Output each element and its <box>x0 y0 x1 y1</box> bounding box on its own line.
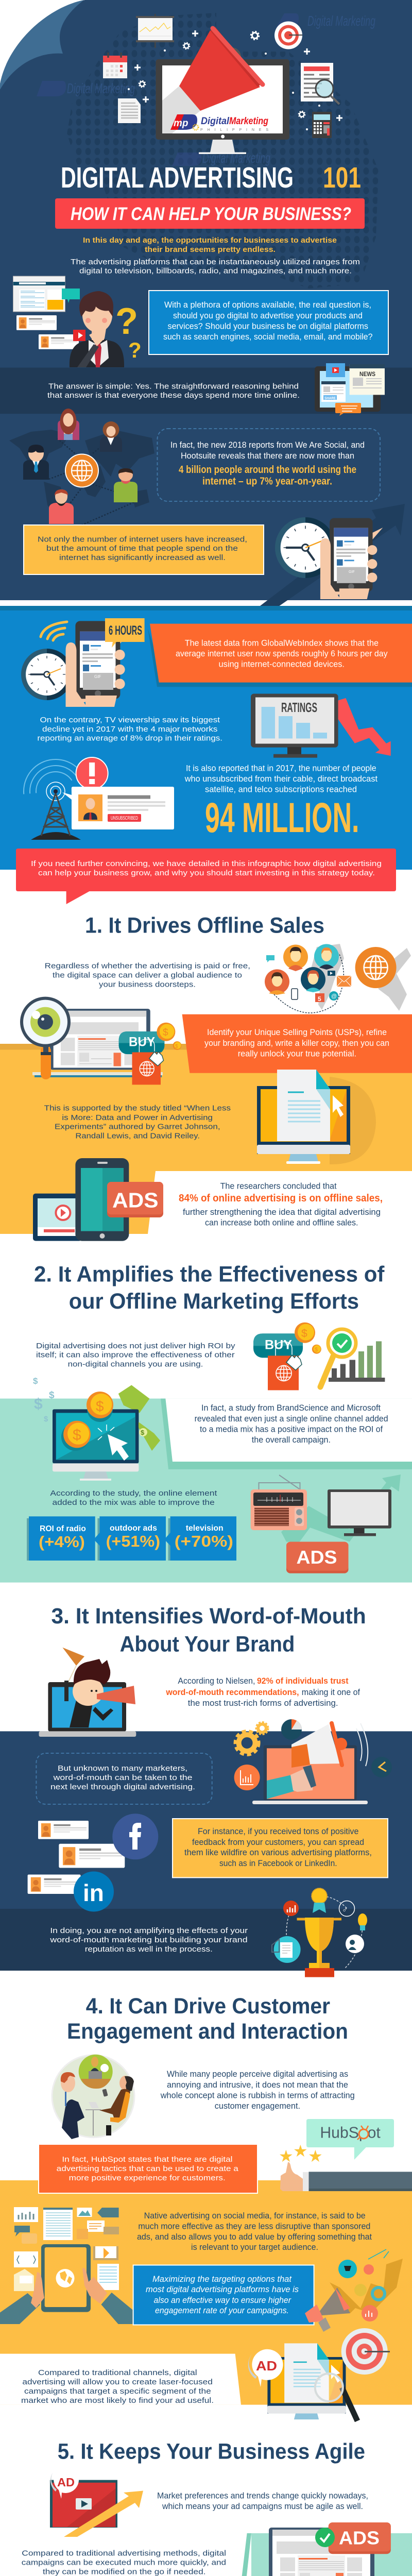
text: perception: whole concept alone is rubbish in terms of attracting <box>160 2091 355 2100</box>
illustration: monitor with coins and money: $ <box>44 1415 48 1423</box>
text: native advertising: much more effective as they are less disruptive than sponsored <box>138 2222 370 2231</box>
illustration: signal tower <box>21 757 90 840</box>
illustration: monitor with coins and money: $ <box>73 1427 81 1444</box>
stat: 94 million <box>184 764 377 841</box>
person: woman in pink <box>49 489 74 524</box>
text: 84 percent finding: The researchers concluded that <box>220 1182 337 1191</box>
text: native advertising: Native advertising on social media, for instance, is said to be <box>144 2211 366 2221</box>
text: brand reputation: In doing, you are not amplifying the effects of your <box>50 1926 248 1935</box>
panel: section 2 offline marketing efforts <box>0 1262 412 1583</box>
illustration: news tablet <box>315 363 385 416</box>
illustration: trophy with achievement icons <box>272 1888 367 1977</box>
text: Nielsen trust: According to Nielsen, <box>178 1676 255 1686</box>
stat boxes: ROI improvements: (+51%) <box>106 1532 160 1550</box>
band: the answer is simple: that answer is that everyone these days spend more time online. <box>47 391 300 400</box>
text: executed quickly <box>22 2549 226 2576</box>
illustration: thinking businessman: ? <box>128 338 142 362</box>
text: laser focused campaigns <box>21 2368 214 2405</box>
icons: gears plus dots <box>128 30 342 130</box>
text: 84 percent finding: 84% of online advertising is on offline sales, <box>179 1193 383 1204</box>
callout: targeting options: most digital advertising platforms have is <box>146 2285 299 2294</box>
callout: wildfire <box>173 1819 388 1877</box>
watermark logos: Digital Marketing <box>202 150 270 166</box>
callout: 4 billion people <box>158 429 380 501</box>
callout: HubSpot speech bubble: HubSpot <box>320 2123 381 2141</box>
stat: 94 million: satellite, and telco subscriptions reached <box>205 785 357 794</box>
text: perception: annoying and intrusive, it does not mean that the <box>167 2080 348 2090</box>
callout: next level <box>36 1753 212 1804</box>
text: Nielsen trust <box>165 1676 360 1708</box>
callout: 4 billion people: 4 billion people around the world using the <box>179 464 356 476</box>
icon: monitor with megaphone <box>156 28 289 154</box>
illustration: laptop with eye magnifier and buy button: $ <box>175 1044 178 1049</box>
illustration: buy button and growth bars: $ <box>315 1347 318 1353</box>
watermark logos: Digital Marketing <box>67 80 135 96</box>
callout: next level: But unknown to many marketers, <box>58 1764 187 1773</box>
illustration: laptop with eye magnifier and buy button: BUY <box>129 1035 155 1049</box>
band: the answer is simple <box>0 368 412 414</box>
text: laser focused campaigns: advertising will allow you to create laser-focused <box>22 2378 213 2386</box>
watermark logos: Digital Marketing <box>307 13 375 29</box>
callout: question box: services? Should your business be on digital platforms <box>168 321 368 331</box>
text: supporting study: Randall Lewis, and David Reiley. <box>75 1131 200 1141</box>
callout: targeting options <box>133 2265 314 2325</box>
text: supporting study <box>44 1104 231 1141</box>
person: woman top <box>58 409 79 440</box>
cards: facebook and linkedin reviews: in <box>83 1879 104 1906</box>
text: executed quickly: campaigns can be executed much more quickly, and <box>22 2558 226 2567</box>
illustration: thumbs up with stars: ★ <box>279 2147 294 2165</box>
callout: time online: internet has significantly increased as well. <box>59 553 226 562</box>
illustration: clock and phone <box>21 621 131 707</box>
callout: question box: should you go digital to advertise your products and <box>173 311 363 320</box>
intro text <box>71 236 360 275</box>
text: supporting study: This is supported by the study titled “When Less <box>44 1104 231 1112</box>
illustration: thumbs up with stars <box>279 2142 412 2191</box>
heading: section 3 <box>52 1604 366 1657</box>
icon: alert <box>76 757 108 789</box>
banner: unique selling points: Identify your Unique Selling Points (USPs), refine <box>207 1028 387 1037</box>
illustration: buy button and growth bars: $ <box>301 1328 307 1340</box>
stat boxes: ROI improvements <box>27 1516 236 1561</box>
callout: further convincing <box>16 849 396 904</box>
text: 84 percent finding: can increase both online and offline sales. <box>205 1218 358 1227</box>
heading: section 5: 5. It Keeps Your Business Agile <box>58 2439 365 2464</box>
heading: section 4 <box>67 1994 348 2044</box>
icon: calculator <box>312 112 332 138</box>
callout: positive experience: more positive experience for customers. <box>69 2174 226 2182</box>
callout: 6 hours: 6 HOURS <box>109 623 142 638</box>
illustration: buy button and growth bars <box>253 1323 385 1390</box>
text: perception <box>160 2070 355 2111</box>
text: native advertising <box>137 2211 372 2252</box>
watermark logos <box>37 13 375 166</box>
illustration: monitor with target and AD bubble <box>248 2328 390 2421</box>
illustration: global audience network <box>265 944 411 1013</box>
illustration: monitor with coins and money: $ <box>141 1429 145 1436</box>
text: market preferences: which means your ad campaigns must be agile as well. <box>162 2502 363 2511</box>
panel: six hours and TV decline <box>0 606 412 904</box>
callout: targeting options: engagement rate of your campaigns. <box>155 2306 289 2315</box>
text: brand reputation <box>49 1926 248 1954</box>
text: brand reputation: reputation as well in the process. <box>85 1945 213 1954</box>
illustration: tablet and content icons <box>0 2207 133 2324</box>
illustration: laptop with eye magnifier and buy button: $ <box>163 1027 168 1038</box>
banner: global web index: The latest data from GlobalWebIndex shows that the <box>185 638 379 648</box>
illustration: laptop megaphone with gears <box>234 1719 392 1804</box>
stat: 94 million: who unsubscribed from their cable, direct broadcast <box>184 774 377 784</box>
illustration: laptop with ads and check <box>256 2522 391 2576</box>
callout: time online: Not only the number of internet users have increased, <box>38 535 247 544</box>
banner: global web index: using internet-connected devices. <box>218 659 345 669</box>
intro text: their brand seems pretty endless. <box>145 245 276 254</box>
illustration: global audience network: 5 <box>318 995 321 1003</box>
heading: section 4: Engagement and Interaction <box>67 2019 348 2044</box>
illustration: phone and tablet with ads <box>33 1158 163 1241</box>
panel: hero header <box>0 0 412 616</box>
subtitle banner <box>55 198 365 229</box>
callout: 4 billion people: In fact, the new 2018 reports from We Are Social, and <box>170 440 365 450</box>
text: BrandScience study: revealed that even just a single online channel added <box>195 1414 388 1423</box>
text: TV viewership: reporting an average of 8% drop in their ratings. <box>37 734 222 743</box>
callout: targeting options: also an effective way to ensure higher <box>153 2296 291 2305</box>
illustration: thumbs up with stars: ★ <box>308 2147 323 2165</box>
icon: document <box>118 98 141 123</box>
callout: positive experience <box>39 2144 258 2193</box>
illustration: monitor with coins and money: $ <box>33 1376 38 1386</box>
callout: next level: next level through digital advertising. <box>50 1783 195 1791</box>
text: 84 percent finding <box>179 1182 383 1227</box>
callout: question box: such as search engines, social media, email, and mobile? <box>163 332 373 342</box>
illustration: monitor with coins and money: $ <box>34 1396 43 1413</box>
intro text: In this day and age, the opportunities for businesses to advertise <box>83 236 337 245</box>
subtitle banner: HOW IT CAN HELP YOUR BUSINESS? <box>71 204 351 224</box>
callout: 4 billion people: internet – up 7% year-on-year. <box>202 476 332 487</box>
title: DIGITAL ADVERTISING <box>61 161 294 194</box>
illustration: global audience network: @ <box>331 993 337 999</box>
banner: unique selling points: your branding and, write a killer copy, then you can <box>204 1039 389 1048</box>
text: perception: While many people perceive digital advertising as <box>167 2070 348 2079</box>
intro text: The advertising platforms that can be instantaneously utilized ranges from <box>71 258 360 266</box>
card: unsubscribed <box>62 787 174 829</box>
logo: Digital Marketing Philippines <box>170 114 268 132</box>
illustration: monitor with coins and money: $ <box>96 1398 104 1414</box>
icon: presentation board <box>136 14 174 48</box>
heading: section 2 <box>34 1262 385 1314</box>
heading: section 2: our Offline Marketing Efforts <box>69 1289 359 1314</box>
text: executed quickly: Compared to traditional advertising methods, digital <box>22 2549 226 2558</box>
heading: section 2: 2. It Amplifies the Effectiveness of <box>34 1262 385 1287</box>
logo: Digital Marketing Philippines: PHILIPPINES <box>200 128 268 132</box>
illustration: AD video with rising arrow: AD <box>57 2476 75 2489</box>
text: global audience: the digital space can deliver a global audience to <box>53 971 242 979</box>
panel: section 5 business agile <box>0 2439 412 2576</box>
text: global audience: your business doorsteps. <box>99 980 196 989</box>
heading: section 3: About Your Brand <box>120 1632 295 1657</box>
stat boxes: ROI improvements: (+70%) <box>175 1532 233 1550</box>
callout: wildfire: them like wildfire on various advertising platforms, <box>184 1848 372 1857</box>
callout: targeting options: Maximizing the targeting options that <box>152 2275 292 2284</box>
stat boxes: ROI improvements: (+4%) <box>39 1533 85 1551</box>
illustration: man shouting from laptop <box>39 1648 136 1737</box>
logo: Digital Marketing Philippines: mp <box>174 118 188 129</box>
callout: wildfire: For instance, if you received tons of positive <box>198 1827 358 1836</box>
heading: section 4: 4. It Can Drive Customer <box>86 1994 330 2019</box>
text: executed quickly: they can be modified on the go if needed. <box>43 2567 206 2576</box>
text: according to the study: added to the mix was able to improve the <box>53 1498 215 1507</box>
stat boxes: ROI improvements: outdoor ads <box>110 1524 157 1533</box>
illustration: monitor with coins and money: $ <box>49 1390 55 1401</box>
person: man in green <box>114 468 138 502</box>
callout: 6 hours <box>105 618 145 648</box>
callout: 4 billion people: Hootsuite reveals that there are now more than <box>181 451 354 461</box>
heading: section 1: 1. It Drives Offline Sales <box>85 913 324 938</box>
text: native advertising: is relevant to your target audience. <box>191 2243 318 2252</box>
arrow: growth trend <box>281 1475 401 1542</box>
band: the answer is simple: The answer is simple: Yes. The straightforward reasoning behind <box>48 382 299 391</box>
callout: further convincing: If you need further convincing, we have detailed in this infographic how digital advertising <box>31 859 382 868</box>
text: supporting study: Experiments” authored by Garret Johnson, <box>55 1122 220 1131</box>
illustration: clock and phone: GIF <box>94 674 101 679</box>
text: global audience <box>45 961 250 989</box>
text: Nielsen trust: the most trust-rich forms of advertising. <box>188 1699 338 1708</box>
text: laser focused campaigns: campaigns that target a specific segment of the <box>24 2387 211 2396</box>
card: unsubscribed: UNSUBSCRIBED <box>111 816 138 821</box>
callout: next level: word-of-mouth can be taken to the <box>53 1773 193 1782</box>
chart: TV ratings: RATINGS <box>281 700 317 715</box>
illustration: thinking businessman <box>70 291 142 367</box>
text: BrandScience study: to a media mix has a positive impact on the ROI of <box>200 1425 383 1434</box>
illustration: news tablet: SHARE <box>324 397 336 400</box>
text: according to the study: According to the study, the online element <box>50 1489 217 1498</box>
callout: further convincing: can help your business grow, and why you should start investing in this strategy today. <box>38 869 375 877</box>
text: laser focused campaigns: market who are most likely to find your ad useful. <box>21 2396 214 2405</box>
text: high ROI: Digital advertising does not just deliver high ROI by <box>36 1342 235 1350</box>
banner: unique selling points: really unlock your true potential. <box>238 1049 356 1058</box>
callout: positive experience: In fact, HubSpot states that there are digital <box>62 2155 233 2164</box>
icon: report with magnifier <box>301 63 339 104</box>
text: BrandScience study <box>195 1403 388 1445</box>
text: supporting study: is More: Data and Power in Advertising <box>62 1113 213 1122</box>
illustration: buy button and growth bars: BUY <box>265 1338 292 1352</box>
text: TV viewership: decline yet in 2017 with the 4 major networks <box>42 725 217 734</box>
banner: global web index <box>148 624 412 687</box>
illustration: news tablet: NEWS <box>359 370 375 378</box>
illustration: trophy with achievement icons: ♂ <box>342 1906 348 1914</box>
illustration: laptop with ads and check: ADS <box>339 2528 380 2549</box>
callout: question box: With a plethora of options available, the real question is, <box>164 300 371 310</box>
text: perception: customer engagement. <box>215 2102 300 2111</box>
illustration: megaphone with social icons <box>305 2249 403 2332</box>
illustration: clock, arrow and phone: GIF <box>349 570 355 574</box>
icon: target <box>274 22 302 49</box>
banner: global web index: average internet user now spends roughly 6 hours per day <box>176 649 388 658</box>
text: BrandScience study: the overall campaign. <box>252 1435 331 1445</box>
illustration: AD video with rising arrow <box>50 2466 143 2537</box>
heading: section 3: 3. It Intensifies Word-of-Mouth <box>52 1604 366 1629</box>
icon: wifi <box>41 622 67 640</box>
text: 84 percent finding: further strengthening the idea that digital advertising <box>183 1208 381 1217</box>
panel: section 1 offline sales <box>0 913 412 1241</box>
illustration: browser window and comment cards <box>13 276 80 349</box>
stat: 94 million: It is also reported that in 2017, the number of people <box>186 764 376 773</box>
text: Nielsen trust: 92% of individuals trust <box>257 1676 349 1686</box>
text: high ROI: itself; it can also improve the effectiveness of other <box>36 1351 235 1360</box>
icon: ads button <box>286 1542 348 1573</box>
banner: unique selling points <box>182 1014 412 1073</box>
text: TV viewership: On the contrary, TV viewership saw its biggest <box>40 716 220 724</box>
text: according to the study <box>50 1489 217 1507</box>
panel: section 3 word of mouth <box>0 1604 412 1977</box>
arrow: declining <box>338 698 391 756</box>
icon: television <box>328 1489 391 1536</box>
logo: Digital Marketing Philippines: Marketing <box>229 116 268 127</box>
illustration: monitor with target and AD bubble: AD <box>256 2358 277 2374</box>
text: native advertising: ads, and also allows you to add value by offering something that <box>137 2232 372 2242</box>
illustration: clock, arrow and phone <box>247 504 405 616</box>
title: 101 <box>323 161 361 194</box>
text: market preferences <box>157 2491 368 2511</box>
text: laser focused campaigns: Compared to traditional channels, digital <box>38 2368 197 2377</box>
callout: positive experience: advertising tactics that can be used to create a <box>57 2164 239 2173</box>
text: global audience: Regardless of whether the advertising is paid or free, <box>45 961 250 970</box>
illustration: phone and tablet with ads: ADS <box>112 1188 159 1212</box>
stat boxes: ROI improvements: television <box>186 1524 224 1533</box>
panel: section 4 customer engagement <box>0 1994 412 2421</box>
text: market preferences: Market preferences and trends change quickly nowadays, <box>157 2491 368 2500</box>
icon: calendar <box>103 53 127 78</box>
logo: Digital Marketing Philippines: Digital <box>201 116 230 127</box>
chart: TV ratings <box>251 693 338 758</box>
callout: time online: but the amount of time that people spend on the <box>46 544 238 553</box>
text: high ROI <box>36 1342 235 1369</box>
callout: wildfire: such as in Facebook or LinkedIn. <box>219 1859 337 1868</box>
callout: HubSpot speech bubble <box>306 2119 394 2160</box>
person: woman with glasses <box>100 421 122 452</box>
text: Nielsen trust: word-of-mouth recommendations, <box>165 1688 299 1697</box>
illustration: monitor with coins and money <box>33 1376 160 1481</box>
text: high ROI: non-digital channels you are using. <box>68 1360 203 1369</box>
intro text: digital to television, billboards, radio, and magazines, and much more. <box>79 267 352 275</box>
illustration: laptop with eye magnifier and buy button <box>22 998 181 1084</box>
illustration: meeting in circle <box>52 2055 134 2139</box>
illustration: thumbs up with stars: ★ <box>293 2142 308 2160</box>
callout: time online <box>24 525 264 574</box>
callout: wildfire: feedback from your customers, you can spread <box>192 1838 364 1847</box>
text: Nielsen trust: making it one of <box>302 1688 360 1697</box>
text: BrandScience study: In fact, a study from BrandScience and Microsoft <box>201 1403 381 1413</box>
illustration: world map with connected people <box>9 409 154 528</box>
icon: radio <box>251 1475 307 1530</box>
callout: question box <box>149 291 388 354</box>
stat boxes: ROI improvements: ROI of radio <box>40 1524 86 1533</box>
cards: facebook and linkedin reviews <box>28 1814 158 1911</box>
text: TV viewership <box>37 716 222 743</box>
illustration: thinking businessman: ? <box>115 301 138 342</box>
illustration: monitor with document <box>257 1070 376 1164</box>
icon: ads button: ADS <box>297 1547 337 1568</box>
person: man with tie <box>23 445 49 480</box>
text: brand reputation: word-of-mouth marketing but building your brand <box>49 1936 248 1944</box>
